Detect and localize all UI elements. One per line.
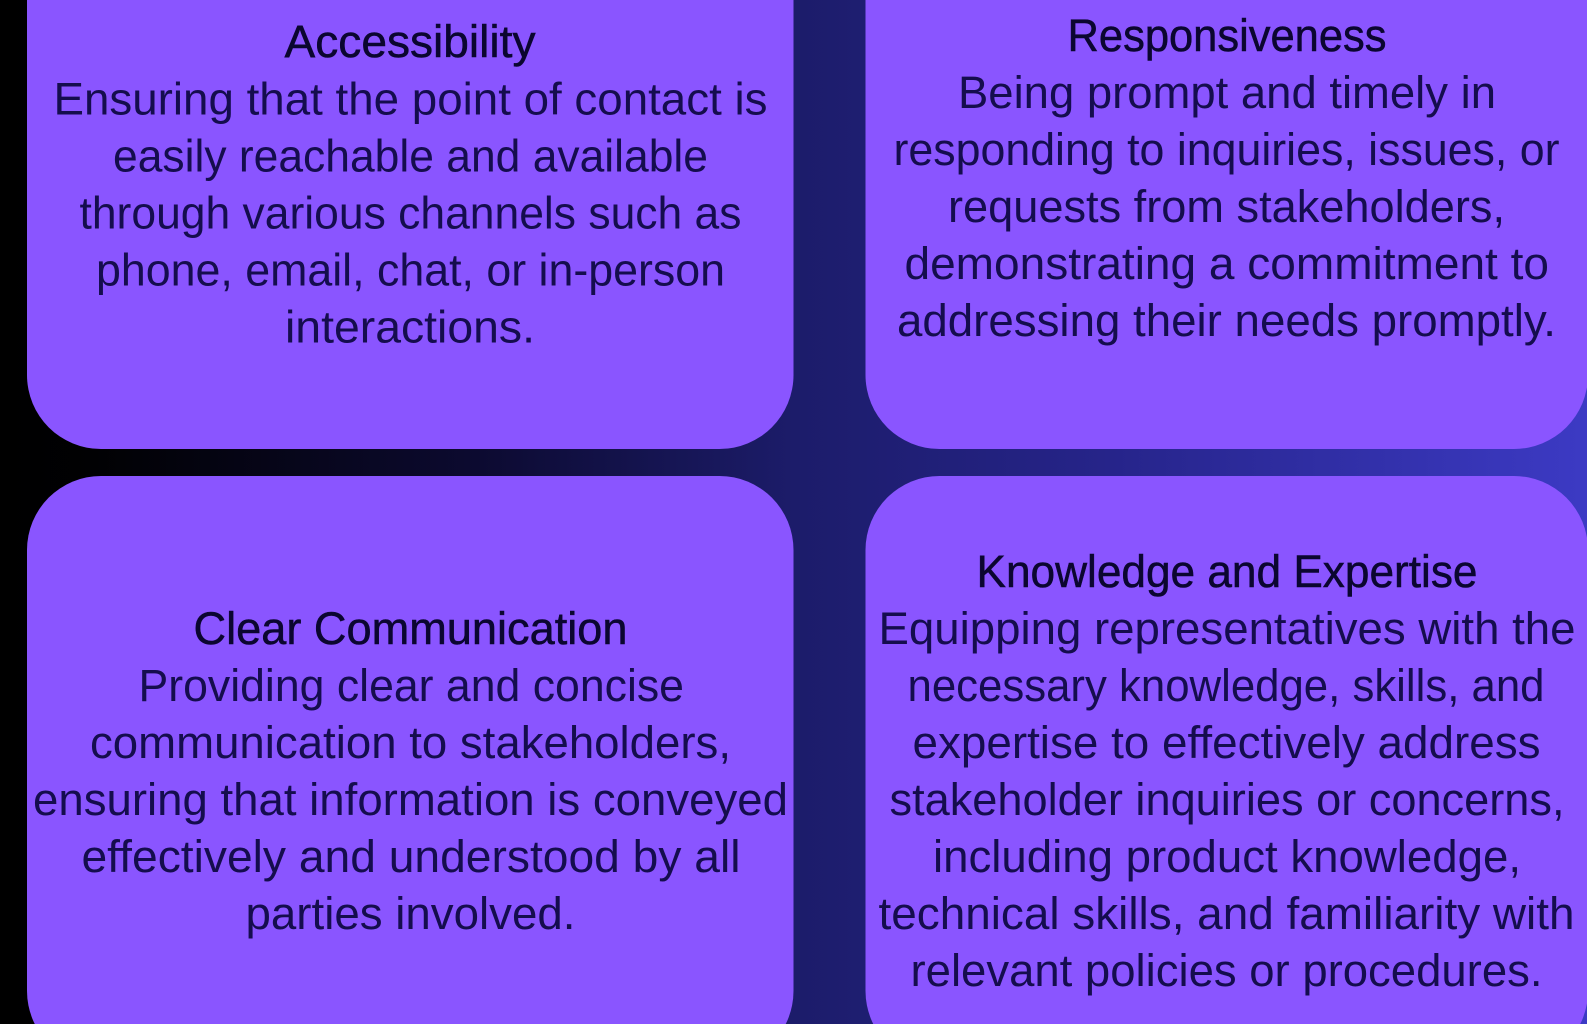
- panel: responsiveness: [866, 0, 1587, 449]
- card: responsiveness: [866, 0, 1587, 449]
- heading: accessibility: Accessibility: [284, 16, 536, 67]
- text: knowledge and expertise description: technical skills, and familiarity with: [878, 888, 1574, 939]
- text: knowledge and expertise description: Equipping representatives with the: [878, 603, 1576, 654]
- text: responsiveness description: addressing their needs promptly.: [897, 295, 1556, 346]
- text: knowledge and expertise description: expertise to effectively address: [912, 717, 1540, 768]
- card: knowledge and expertise: [866, 476, 1587, 1024]
- text: knowledge and expertise description: including product knowledge,: [933, 831, 1521, 882]
- text: accessibility description: Ensuring that the point of contact is: [54, 74, 768, 124]
- text: responsiveness description: responding to inquiries, issues, or: [894, 124, 1560, 175]
- text: clear communication description: communication to stakeholders,: [90, 717, 731, 768]
- text: knowledge and expertise description: necessary knowledge, skills, and: [908, 660, 1544, 711]
- text: responsiveness description: demonstrating a commitment to: [904, 238, 1549, 289]
- text: accessibility description: phone, email, chat, or in-person: [96, 244, 725, 296]
- heading: knowledge and expertise: Knowledge and Expertise: [976, 546, 1478, 597]
- text: responsiveness description: [894, 67, 1560, 346]
- panel: knowledge and expertise: [866, 476, 1587, 1024]
- heading: clear communication: Clear Communication: [194, 603, 628, 654]
- panel: clear communication: [27, 476, 794, 1024]
- text: accessibility description: easily reachable and available: [113, 130, 708, 182]
- text: responsiveness description: requests from stakeholders,: [948, 181, 1505, 232]
- text: responsiveness description: Being prompt and timely in: [958, 67, 1496, 118]
- text: accessibility description: through various channels such as: [80, 188, 742, 238]
- card: clear communication: [27, 476, 794, 1024]
- text: clear communication description: Providing clear and concise: [138, 660, 684, 711]
- panel: accessibility: [27, 0, 794, 449]
- text: knowledge and expertise description: relevant policies or procedures.: [910, 945, 1542, 996]
- text: knowledge and expertise description: [878, 603, 1576, 996]
- text: knowledge and expertise description: stakeholder inquiries or concerns,: [890, 774, 1564, 825]
- card: accessibility: [27, 0, 794, 449]
- text: accessibility description: [54, 74, 768, 352]
- text: clear communication description: effectively and understood by all: [82, 831, 740, 882]
- text: accessibility description: interactions.: [285, 302, 535, 352]
- heading: responsiveness: Responsiveness: [1068, 10, 1386, 61]
- text: clear communication description: ensuring that information is conveyed: [33, 774, 788, 825]
- text: clear communication description: parties involved.: [246, 888, 576, 939]
- text: clear communication description: [33, 660, 788, 939]
